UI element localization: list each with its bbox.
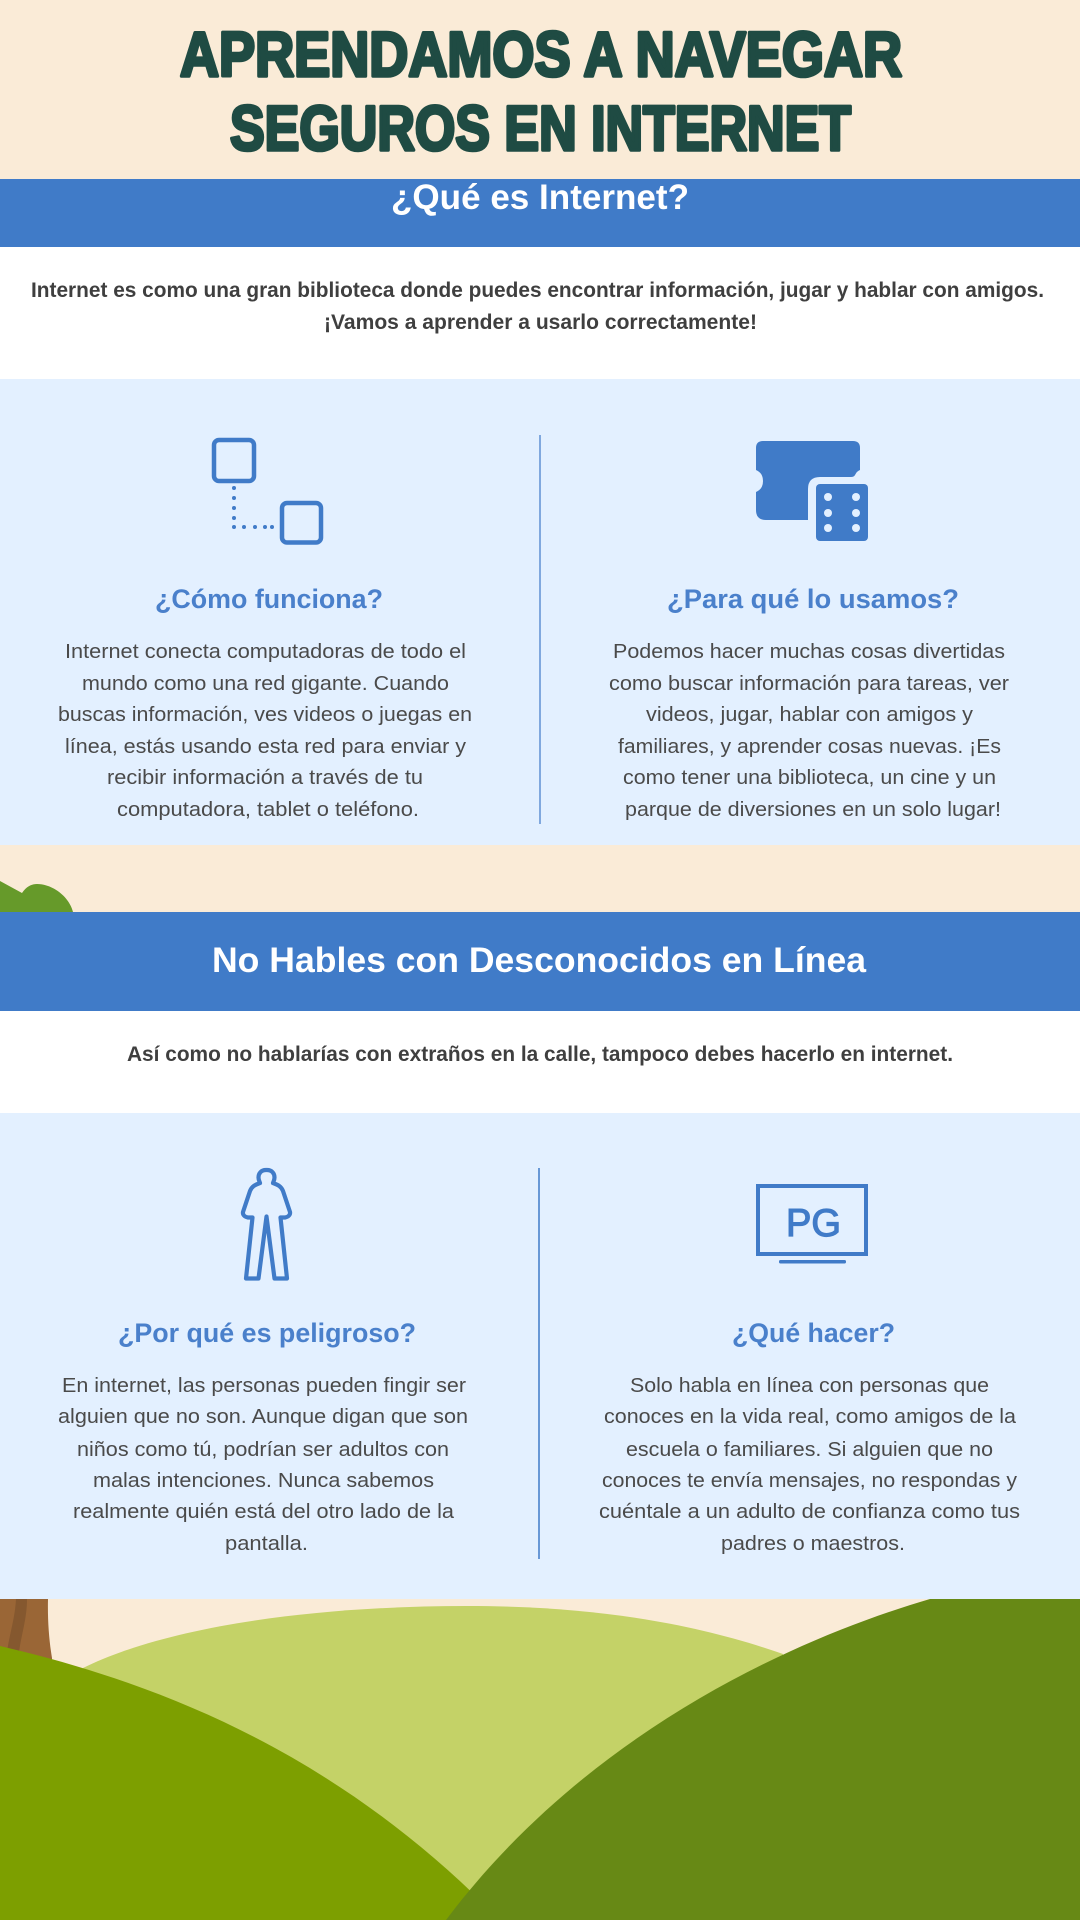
text block: por qué es peligroso: realmente quién está del otro lado de la (73, 1500, 455, 1523)
intro text block: Internet es como una gran biblioteca donde puedes encontrar información, jugar y hablar con amigos. (31, 278, 1044, 302)
text block: para qué lo usamos: parque de diversiones en un solo lugar! (625, 798, 1001, 821)
text block: qué hacer: padres o maestros. (721, 1532, 905, 1555)
text block: por qué es peligroso: pantalla. (225, 1532, 308, 1555)
title (180, 20, 902, 164)
text block: qué hacer: cuéntale a un adulto de confianza como tus (599, 1500, 1020, 1523)
text block: para qué lo usamos: como buscar información para tareas, ver (609, 672, 1009, 695)
panel: cómo funciona y para qué lo usamos (0, 379, 1080, 845)
intro text block: ¡Vamos a aprender a usarlo correctamente! (324, 310, 757, 334)
tree trunk (0, 1599, 52, 1662)
intro text block: desconocidos: Así como no hablarías con extraños en la calle, tampoco debes hacerlo en internet. (127, 1042, 953, 1066)
text block: cómo funciona: línea, estás usando esta red para enviar y (65, 735, 467, 758)
illustration: bush (0, 881, 73, 912)
text block: qué hacer: Solo habla en línea con personas que (630, 1374, 989, 1397)
icon: person outline (243, 1170, 290, 1278)
text block: por qué es peligroso: niños como tú, podrían ser adultos con (77, 1438, 449, 1461)
section header: No Hables con Desconocidos en Línea (0, 912, 1080, 1011)
text block: por qué es peligroso: malas intenciones. Nunca sabemos (93, 1469, 434, 1492)
heading: ¿Para qué lo usamos?: ¿Para qué lo usamos? (667, 584, 959, 614)
icon: connected nodes (214, 440, 321, 542)
heading: ¿Cómo funciona?: ¿Cómo funciona? (155, 584, 383, 614)
text block: cómo funciona: buscas información, ves videos o juegas en (58, 703, 472, 726)
right hill (446, 1599, 1080, 1920)
intro text block (0, 247, 1080, 379)
text block: cómo funciona: computadora, tablet o teléfono. (117, 798, 419, 821)
text block: cómo funciona: Internet conecta computadoras de todo el (65, 640, 466, 663)
panel: por qué es peligroso y qué hacer (0, 1113, 1080, 1599)
text block: por qué es peligroso: En internet, las personas pueden fingir ser (62, 1374, 466, 1397)
intro text block: desconocidos (0, 1011, 1080, 1113)
icon: PG television (758, 1186, 866, 1264)
text block: para qué lo usamos: videos, jugar, hablar con amigos y (646, 703, 974, 726)
text block: por qué es peligroso: alguien que no son. Aunque digan que son (58, 1405, 468, 1428)
title: APRENDAMOS A NAVEGAR (180, 20, 902, 90)
heading: ¿Por qué es peligroso?: ¿Por qué es peligroso? (118, 1318, 416, 1348)
left hill (0, 1646, 498, 1920)
text block: cómo funciona: mundo como una red gigante. Cuando (82, 672, 449, 695)
text block: qué hacer: conoces te envía mensajes, no respondas y (602, 1469, 1018, 1492)
text block: qué hacer (599, 1374, 1020, 1555)
text block: para qué lo usamos: familiares, y aprender cosas nuevas. ¡Es (618, 735, 1001, 758)
text block: para qué lo usamos (609, 640, 1009, 821)
text block: para qué lo usamos: Podemos hacer muchas cosas divertidas (613, 640, 1005, 663)
icon: ticket and die (756, 441, 868, 541)
text block: para qué lo usamos: como tener una biblioteca, un cine y un (623, 766, 996, 789)
section header: ¿Qué es Internet?: ¿Qué es Internet? (391, 178, 689, 217)
text block: por qué es peligroso (58, 1374, 468, 1555)
heading: ¿Qué hacer?: ¿Qué hacer? (732, 1318, 895, 1348)
section header: No Hables con Desconocidos en Línea: No Hables con Desconocidos en Línea (212, 941, 867, 980)
text block: cómo funciona: recibir información a través de tu (107, 766, 423, 789)
text block: qué hacer: conoces en la vida real, como amigos de la (604, 1405, 1017, 1428)
section header: ¿Qué es Internet? (0, 178, 1080, 247)
text block: cómo funciona (58, 640, 472, 821)
text block: qué hacer: escuela o familiares. Si alguien que no (626, 1438, 993, 1461)
illustration: landscape with hills and tree trunk (0, 1599, 1080, 1920)
icon: PG television: PG (786, 1202, 841, 1245)
title: SEGUROS EN INTERNET (230, 94, 851, 164)
light hill (83, 1606, 783, 1920)
